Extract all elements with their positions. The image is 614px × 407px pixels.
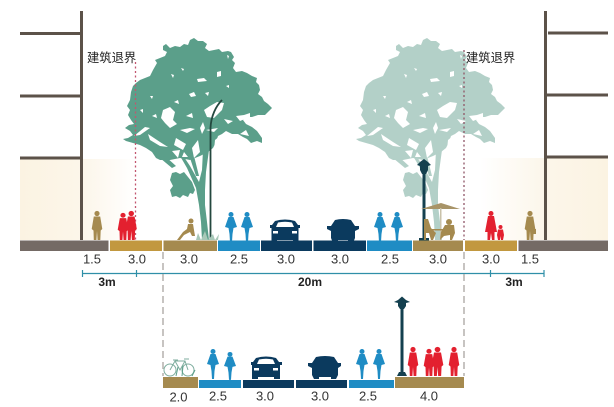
- cyclists lower right: [356, 349, 385, 379]
- measure labels: [98, 275, 523, 289]
- lower road surface strip: [163, 377, 464, 388]
- icon: left tree: [123, 38, 272, 240]
- icon: street lamp with curved arm: [210, 100, 222, 240]
- panel: right building: [480, 11, 608, 240]
- car front lower: [251, 356, 282, 379]
- pedestrians red left: [118, 211, 137, 240]
- main dimension labels: 3.0: [429, 252, 447, 266]
- icon: right tree: [356, 38, 505, 240]
- main road surface strip: [20, 240, 608, 251]
- car rear: [327, 219, 359, 243]
- icon: lower lamp post: [394, 296, 410, 376]
- seated person: [177, 218, 195, 240]
- main dimension labels: 3.0: [128, 252, 146, 266]
- main dimension labels: 3.0: [482, 252, 500, 266]
- main dimension labels: 1.5: [521, 252, 539, 266]
- woman and child red: [485, 211, 504, 240]
- car front: [270, 220, 300, 243]
- main dimension labels: 3.0: [180, 252, 198, 266]
- pedestrian tan left: [92, 211, 102, 240]
- lower dimension labels: 2.5: [209, 388, 227, 404]
- lower dimension labels: 2.0: [169, 390, 188, 404]
- left projection dashed line: [162, 252, 164, 376]
- cafe umbrella and seated people: [421, 203, 460, 240]
- grass: [196, 231, 219, 240]
- cyclists left: [225, 212, 253, 242]
- main dimension labels: 2.5: [230, 252, 248, 266]
- label: left building setback: 建筑退界: [87, 50, 136, 65]
- measure labels: 3m: [505, 275, 523, 289]
- car rear lower: [308, 356, 341, 379]
- lower dimension labels: 2.5: [359, 388, 377, 404]
- lower dimension labels: [169, 388, 438, 404]
- pedestrians red lower: [408, 347, 459, 376]
- lower dimension labels: 4.0: [420, 388, 438, 404]
- icon: bicycle parking: [164, 359, 195, 376]
- total width measure line: [82, 270, 544, 277]
- pedestrian tan right: [525, 211, 536, 240]
- main dimension labels: 2.5: [381, 252, 399, 266]
- cyclists right: [374, 212, 403, 242]
- right projection dashed line: [463, 252, 465, 376]
- right setback line: [463, 50, 465, 240]
- left setback line: [134, 62, 136, 240]
- main dimension labels: [83, 252, 539, 266]
- label: right building setback: 建筑退界: [466, 50, 515, 65]
- main dimension labels: 3.0: [331, 252, 349, 266]
- lower dimension labels: 3.0: [311, 388, 329, 404]
- measure labels: 20m: [298, 275, 322, 289]
- main dimension labels: 1.5: [83, 252, 101, 266]
- lower dimension labels: 3.0: [256, 388, 274, 404]
- cyclists lower left: [207, 349, 236, 380]
- panel: left building: [20, 11, 136, 240]
- main dimension labels: 3.0: [277, 252, 295, 266]
- measure labels: 3m: [98, 275, 116, 289]
- icon: right lamp post: [417, 159, 431, 241]
